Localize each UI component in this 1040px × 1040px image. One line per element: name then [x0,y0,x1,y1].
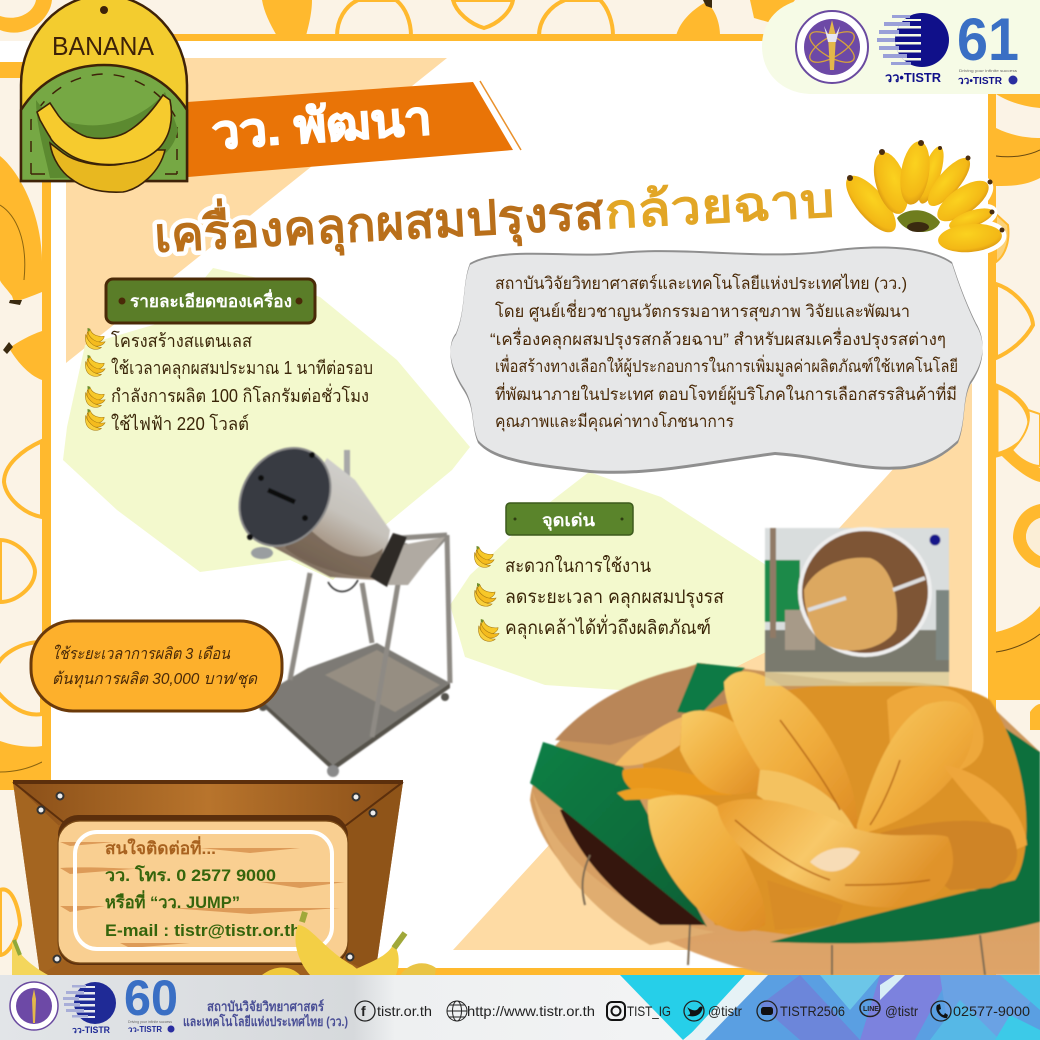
icon: banana [475,583,496,606]
logo caption: วว•TISTR [885,70,942,85]
logo: institute seal [796,11,868,83]
icon: instagram [607,1002,625,1020]
machine legs [290,535,450,737]
icon: banana [85,409,105,430]
banana tag logo [21,0,187,192]
footer logo: 60 years: 60 [124,970,178,1026]
list: highlights [474,546,724,641]
machine base [258,643,450,765]
footer logo: seal [10,982,58,1030]
pattern: top strip [0,0,795,36]
list: machine details: ใช้เวลาคลุกผสมประมาณ 1 นาทีต่อรอบ [111,357,373,379]
photo: banana chips in bamboo tray [530,663,1040,975]
list: machine details: กำลังการผลิต 100 กิโลกรัมต่อชั่วโมง [111,383,369,406]
callout: production time and cost [31,621,282,711]
contact text: วว. โทร. 0 2577 9000 [105,865,276,885]
tag label: BANANA [52,31,155,61]
callout: production time and cost: ใช้ระยะเวลาการผลิต 3 เดือน [52,644,231,663]
list: highlights: คลุกเคล้าได้ทั่วถึงผลิตภัณฑ์ [505,614,711,640]
tray [530,663,1040,975]
list: machine details: ใช้ไฟฟ้า 220 โวลต์ [111,413,249,434]
footer logo: TISTR: วว-TISTR [72,1025,110,1035]
drum body [273,458,390,580]
paper shaped text panel [451,246,983,474]
pattern: right strip [996,94,1040,730]
social links: tistr.or.th [377,1003,432,1019]
footer blue pattern [620,975,1040,1040]
wooden contact sign [13,782,403,975]
chip layers [640,682,1026,935]
icon: line: LINE [863,1006,879,1013]
icon: banana bunch [838,139,1004,255]
ribbon text: วว. พัฒนา [210,91,433,159]
logo: 61 years: Driving your infinite success [959,68,1017,73]
footer logo: TISTR [63,982,116,1035]
description text: โดย ศูนย์เชี่ยวชาญนวัตกรรมอาหารสุขภาพ วิจัยและพัฒนา [495,299,910,322]
decorative bananas at sign base [12,912,436,975]
social links: TISTR2506 [780,1003,845,1019]
social links: @tistr [885,1003,918,1019]
icon: banana [85,355,105,376]
description text: คุณภาพและมีคุณค่าทางโภชนาการ [495,411,734,432]
social links: 02577-9000 [953,1003,1030,1019]
badge: machine details: รายละเอียดของเครื่อง [130,289,292,311]
top right logo panel [762,2,1018,94]
peach background shape: upper left [66,58,447,363]
list: machine details: โครงสร้างสแตนเลส [111,330,252,351]
main title: กล้วยฉาบ [603,174,836,239]
footer logo: 60 years: วว-TISTR [128,1025,162,1034]
icon: facebook: f [361,1003,366,1019]
leaves [530,742,707,927]
list: highlights: สะดวกในการใช้งาน [505,555,651,577]
sign inner border [75,832,332,949]
pattern: left strip [0,62,42,955]
icon: phone [931,1001,951,1021]
description text: สถาบันวิจัยวิทยาศาสตร์และเทคโนโลยีแห่งประเทศไทย (วว.) [495,273,907,293]
photo: chips in drum [765,527,949,686]
icon: globe [447,1001,467,1021]
logo: 61 years: 61 [957,6,1019,73]
list: machine details [85,328,373,434]
icon: youtube [757,1001,777,1021]
logo: TISTR [877,13,949,85]
orange ribbon heading [187,81,521,177]
contact text: หรือที่ “วว. JUMP” [105,890,240,912]
wheels [327,765,339,777]
badge: machine details [106,279,315,323]
contact text [105,836,301,940]
icon: line [860,1000,880,1016]
footer bar [0,970,1040,1040]
tray bindings [583,855,985,975]
description text: เพื่อสร้างทางเลือกให้ผู้ประกอบการในการเพิ่มมูลค่าผลิตภัณฑ์ใช้เทคโนโลยี [495,354,958,377]
contact text: สนใจติดต่อที่... [105,836,216,858]
social links: TIST_IG [627,1003,671,1019]
machine post [344,450,350,490]
drum lid [221,430,349,564]
photo: mixing machine [221,430,450,777]
social links [355,1000,1030,1021]
lower banana [50,143,165,192]
social links: http://www.tistr.or.th [467,1003,595,1019]
upper banana [37,95,172,164]
footer logo: 60 years: Driving your infinite success [128,1020,172,1024]
badge: highlights: จุดเด่น [542,511,595,531]
social links: @tistr [708,1003,742,1019]
contact text: E-mail : tistr@tistr.or.th [105,921,301,940]
green brush area: left [63,268,470,580]
icon: facebook [355,1001,375,1021]
main title [152,165,836,266]
footer organisation name: สถาบันวิจัยวิทยาศาสตร์ [207,999,324,1014]
icon: banana [474,546,494,567]
description text [490,273,958,432]
icon: banana [85,386,105,407]
icon: banana [478,619,499,641]
logo: 61 years: วว•TISTR [958,76,1003,87]
badge: highlights [506,503,633,535]
footer organisation name: และเทคโนโลยีแห่งประเทศไทย (วว.) [183,1013,348,1029]
callout: production time and cost: ต้นทุนการผลิต 30,000 บาท/ชุด [52,670,259,689]
description text: “เครื่องคลุกผสมปรุงรสกล้วยฉาบ” สำหรับผสมเครื่องปรุงรสต่างๆ [490,327,946,350]
icon: twitter [684,1001,704,1021]
footer organisation name [183,999,348,1029]
green brush area: right [450,472,790,690]
description text: ที่พัฒนาภายในประเทศ ตอบโจทย์ผู้บริโภคในการเลือกสรรสินค้าที่มี [495,382,957,405]
main title: เครื่องคลุกผสมปรุงรส [152,177,606,266]
list: highlights: ลดระยะเวลา คลุกผสมปรุงรส [505,587,724,609]
peach background shape: lower right [453,383,972,950]
icon: banana [85,328,105,349]
